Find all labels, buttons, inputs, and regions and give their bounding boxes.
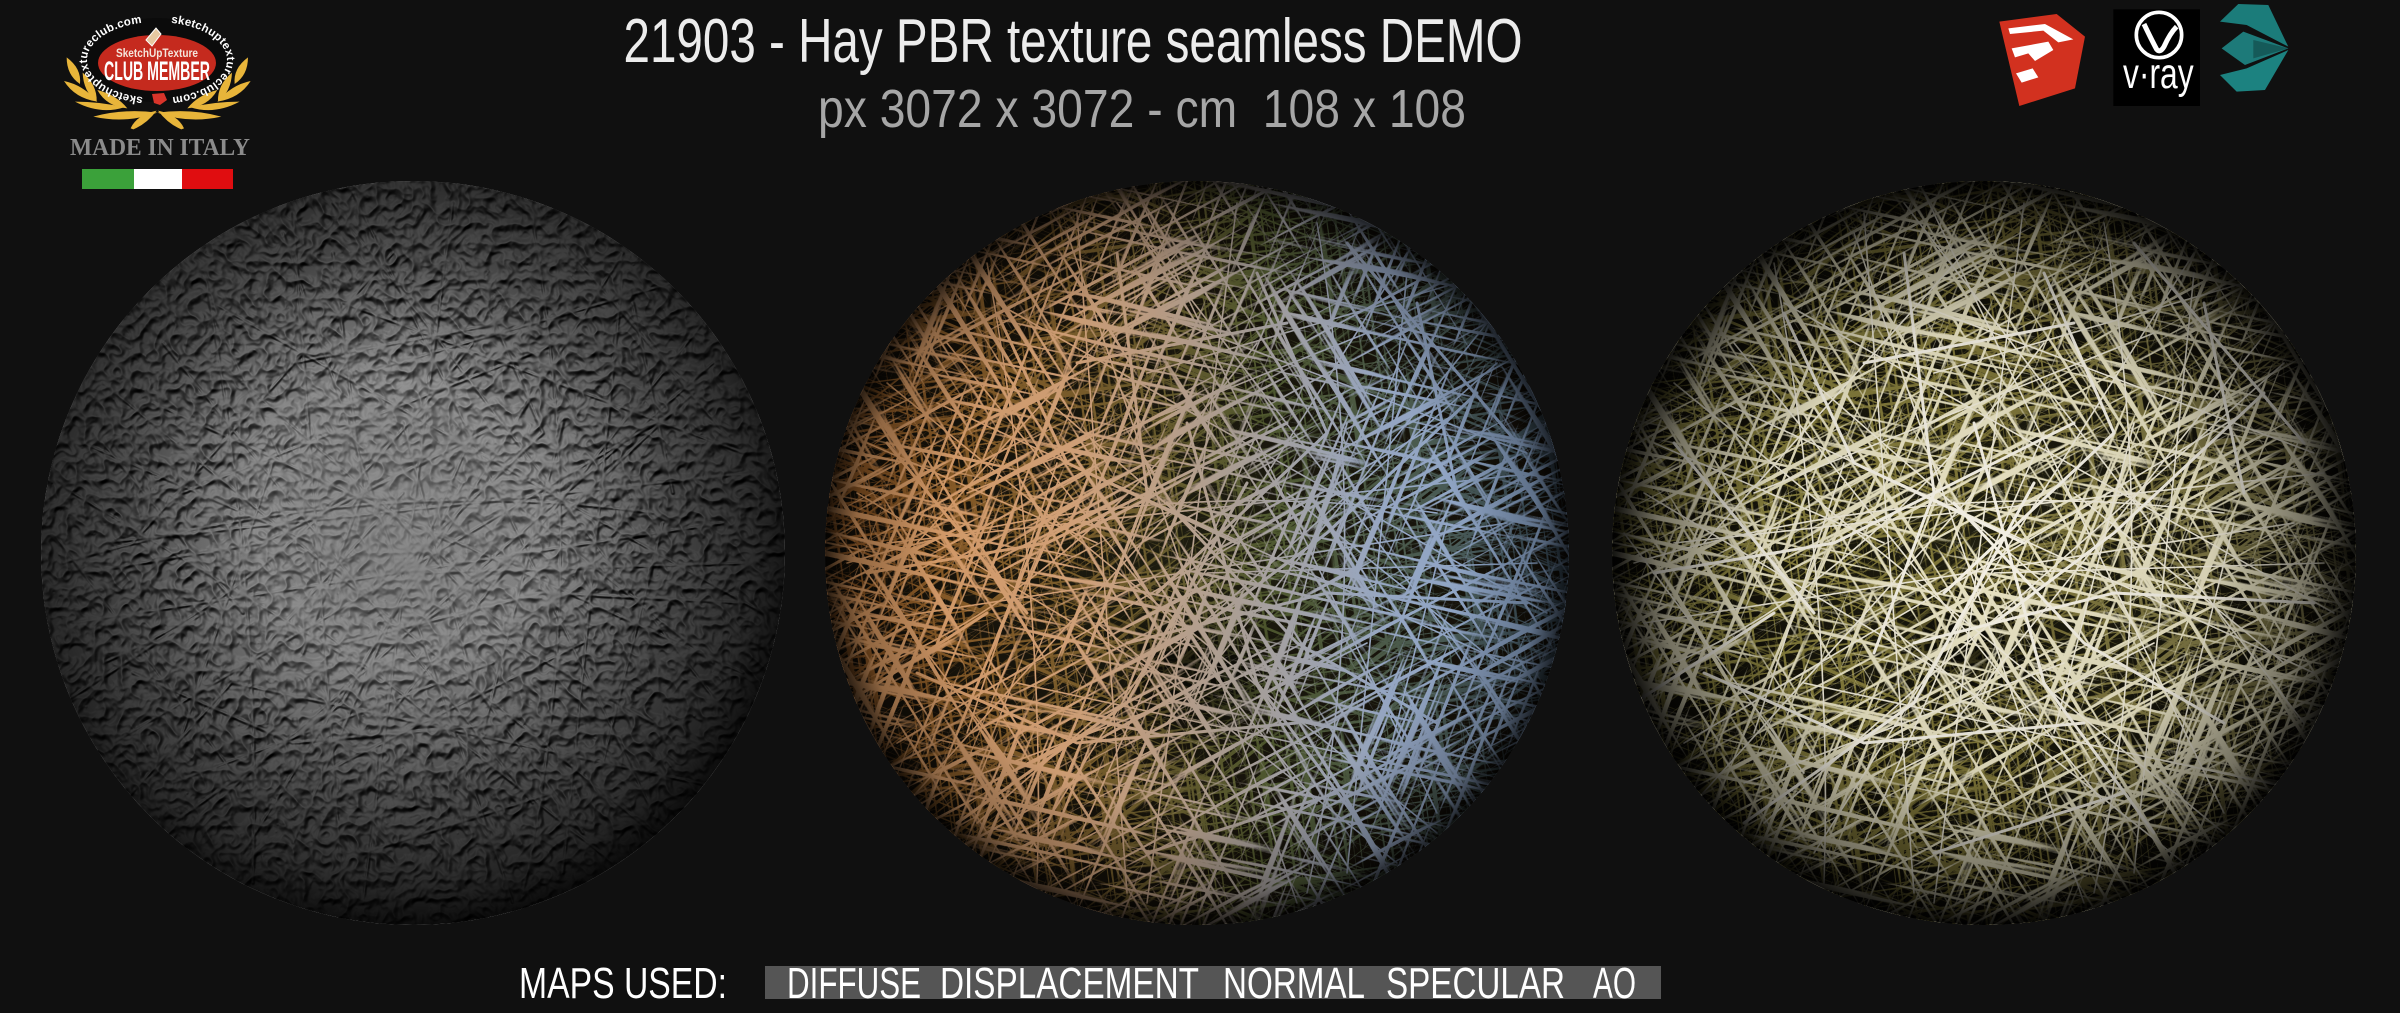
made in italy: MADE IN ITALY xyxy=(70,135,250,161)
club member text: CLUB MEMBER xyxy=(104,56,210,86)
maps used label: MAPS USED: xyxy=(519,959,727,1008)
ring text xyxy=(80,16,234,104)
fine straw layer xyxy=(1612,181,2356,925)
laurel wreath xyxy=(64,57,251,129)
maps list bar: DISPLACEMENT xyxy=(940,959,1199,1008)
long straws xyxy=(1624,193,2334,903)
maps list bar: SPECULAR xyxy=(1386,959,1565,1008)
sphere: displacement map xyxy=(23,163,803,943)
shading falloff xyxy=(41,181,785,925)
maps list bar: NORMAL xyxy=(1223,959,1365,1008)
smooth central glow xyxy=(192,344,591,740)
badge heading: SketchUpTexture xyxy=(116,48,198,60)
shading falloff xyxy=(1612,181,2356,925)
ring text: sketchuptextureclub.com xyxy=(172,16,234,103)
dark pocket xyxy=(1140,631,1260,715)
maps list bar xyxy=(765,959,1661,1008)
sphere: diffuse map xyxy=(825,181,1569,925)
icon: V-Ray: v·ray xyxy=(2123,50,2194,98)
thick straws xyxy=(847,243,1527,853)
italian flag xyxy=(82,169,233,189)
long straws xyxy=(837,193,1547,903)
maps list bar: DIFFUSE xyxy=(787,959,921,1008)
subtitle dimensions: px 3072 x 3072 - cm 108 x 108 xyxy=(818,79,1466,139)
sphere: specular map xyxy=(1612,181,2356,925)
shading falloff xyxy=(825,181,1569,925)
ring text: sketchuptextureclub.com xyxy=(80,17,142,104)
maps list bar: AO xyxy=(1593,959,1636,1008)
bright straw layer xyxy=(1612,181,2356,925)
badge paintbrush xyxy=(146,28,161,46)
red oval xyxy=(98,35,216,91)
thick straws xyxy=(1634,243,2314,853)
fine straw layer xyxy=(825,181,1569,925)
mini sketchup mark xyxy=(152,93,167,105)
title: 21903 - Hay PBR texture seamless DEMO xyxy=(624,7,1522,76)
logo: SketchUp Texture club member badge xyxy=(64,16,251,189)
ring backing xyxy=(81,18,233,102)
icon: V-Ray xyxy=(2113,9,2200,106)
icon: SketchUp xyxy=(1999,14,2085,106)
dark pocket xyxy=(1915,601,2035,685)
icon: 3ds Max xyxy=(2220,4,2288,92)
embossed surface xyxy=(23,163,803,943)
bright straw layer xyxy=(825,181,1569,925)
